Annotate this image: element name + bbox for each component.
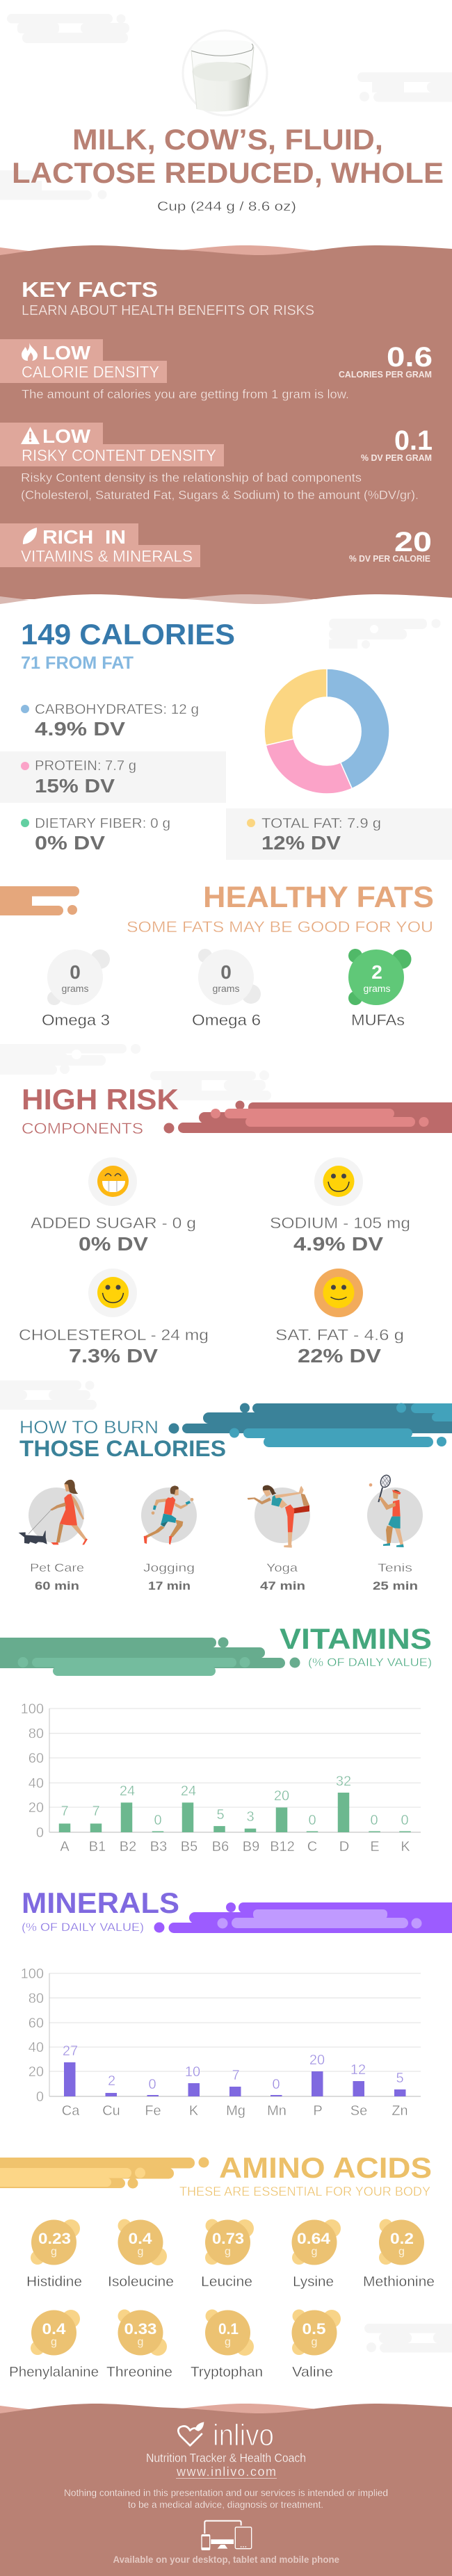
bar chart: vitamins: B2 (120, 1839, 136, 1854)
subheading: percent of daily value: (% OF DAILY VALUE) (22, 1921, 144, 1934)
subheading: percent of daily value: (% OF DAILY VALUE) (308, 1656, 432, 1669)
heading: those calories: THOSE CALORIES (19, 1436, 226, 1461)
metric: cholesterol: CHOLESTEROL - 24 mg (19, 1326, 209, 1344)
metric: mufas: MUFAs (351, 1011, 405, 1029)
metric: mufas: 2 (371, 961, 382, 983)
bar chart: vitamins: 40 (29, 1776, 44, 1791)
bar chart: vitamins: 20 (274, 1788, 289, 1804)
bar chart: minerals: Ca (62, 2103, 80, 2119)
amino values: first row: 0.73 (212, 2230, 244, 2247)
stat unit: dv per gram: % DV PER GRAM (361, 453, 432, 463)
bar chart: minerals: Mn (267, 2103, 286, 2119)
amino values: first row: g (312, 2246, 317, 2258)
label: rich in: RICH IN (42, 526, 126, 548)
amino values: second row: 0.1 (218, 2320, 239, 2338)
decorative clouds: header (0, 14, 452, 200)
panel: amino acids (0, 2151, 452, 2380)
bar chart: vitamins: 7 (92, 1804, 100, 1819)
bar chart: minerals: Cu (102, 2103, 120, 2119)
row: carbohydrates (21, 702, 199, 740)
activity: pet care (19, 1480, 88, 1592)
label boxes: low calorie density (0, 339, 167, 383)
icon: flame (22, 343, 38, 361)
bar chart: vitamins: 100 (21, 1702, 44, 1717)
metric: cholesterol (19, 1269, 209, 1367)
panel: minerals (21, 1886, 452, 2119)
icon: leaf (23, 528, 37, 544)
heading: amino acids: AMINO ACIDS (219, 2151, 432, 2184)
row: protein: 15% DV (35, 775, 115, 797)
metric: omega 3: 0 (70, 961, 81, 983)
bar chart: vitamins: B6 (212, 1839, 229, 1854)
band: protein (0, 751, 226, 803)
bar chart: vitamins: 24 (120, 1784, 135, 1799)
subheading: key facts: LEARN ABOUT HEALTH BENEFITS OR RISKS (22, 303, 314, 318)
amino values: second row: Valine (292, 2365, 333, 2380)
activity: yoga (248, 1485, 310, 1592)
bar chart: minerals: 5 (396, 2071, 404, 2086)
metric: mufas: grams (364, 983, 390, 994)
stat unit: dv per calorie: % DV PER CALORIE (349, 554, 430, 564)
decorative bars: vitamins (0, 1638, 300, 1676)
activity: jogging: Jogging (143, 1561, 195, 1574)
bar chart: minerals: P (313, 2103, 323, 2119)
metric: added sugar: ADDED SUGAR - 0 g (31, 1214, 196, 1232)
heading: vitamins: VITAMINS (280, 1622, 432, 1655)
row: dietary fiber (21, 816, 170, 854)
panel: healthy fats (0, 881, 434, 1029)
amino values: first row: Histidine (26, 2274, 82, 2290)
website link: www.inlivo.com (176, 2465, 276, 2479)
band: total fat (226, 808, 452, 860)
bar chart: vitamins: B5 (181, 1839, 197, 1854)
decorative bars: healthy fats (0, 886, 79, 915)
decorative bars: burn (168, 1403, 452, 1447)
metric: saturated fat: 22% DV (298, 1345, 381, 1367)
activity: jogging: 17 min (148, 1579, 191, 1592)
metric: omega 6: Omega 6 (192, 1011, 261, 1029)
amino values: second row: g (312, 2336, 317, 2348)
bar chart: vitamins: 0 (308, 1813, 316, 1828)
bar chart: minerals: 10 (185, 2064, 200, 2080)
bar chart: vitamins: B1 (89, 1839, 106, 1854)
description: risky content: (Cholesterol, Saturated Fat, Sugars & Sodium) to the amount (%DV/gr). (21, 488, 419, 502)
bar chart: vitamins: 0 (154, 1813, 162, 1828)
row: dietary fiber: DIETARY FIBER: 0 g (35, 816, 170, 831)
amino values: first row: g (138, 2246, 143, 2258)
amino values: first row: g (51, 2246, 57, 2258)
bar chart: minerals: 20 (309, 2053, 325, 2068)
heading: 149 calories: 149 CALORIES (21, 618, 235, 651)
serving size: Cup (244 g / 8.6 oz) (157, 199, 296, 213)
panel: calories (0, 618, 452, 860)
row: carbohydrates: 4.9% DV (35, 718, 125, 740)
bar chart: minerals: 0 (36, 2089, 44, 2105)
heading: healthy fats: HEALTHY FATS (203, 881, 434, 914)
metric: omega 3 (42, 949, 110, 1029)
bar chart: minerals: 0 (148, 2077, 156, 2092)
amino values: second row: Tryptophan (191, 2365, 263, 2380)
bar chart: minerals: Se (350, 2103, 367, 2119)
row: total fat (247, 816, 381, 854)
bar chart: vitamins: A (60, 1839, 70, 1854)
amino values: second row: 0.33 (124, 2320, 157, 2338)
bar chart: vitamins: 60 (29, 1751, 44, 1766)
metric: mufas (348, 949, 412, 1029)
bar chart: minerals: 27 (63, 2044, 78, 2059)
metric: omega 3: Omega 3 (42, 1011, 110, 1029)
icon: devices (202, 2521, 252, 2550)
icon: glass of milk (183, 31, 267, 115)
bar chart: minerals: Mg (226, 2103, 245, 2119)
bar chart: vitamins: 0 (370, 1813, 378, 1828)
bar chart: vitamins: C (307, 1839, 317, 1854)
amino values: first row: 0.64 (297, 2230, 331, 2247)
icon: woman walking dog (19, 1480, 88, 1544)
metric: added sugar: 0% DV (79, 1233, 148, 1255)
bar chart: vitamins: 20 (29, 1800, 44, 1816)
amino values: first row: g (225, 2246, 231, 2258)
amino values: first row: 0.4 (128, 2230, 152, 2247)
bar chart: vitamins: 80 (29, 1727, 44, 1742)
tagline: Nutrition Tracker & Health Coach (146, 2451, 306, 2465)
row: total fat: 12% DV (261, 832, 341, 854)
activity: yoga: Yoga (266, 1561, 298, 1574)
panel: vitamins (0, 1622, 432, 1854)
icon: runner (144, 1485, 193, 1544)
decorative bars: amino acids (0, 2158, 209, 2188)
label: risky content density: RISKY CONTENT DENSITY (22, 446, 216, 464)
stat unit: calories per gram: CALORIES PER GRAM (339, 370, 432, 380)
amino values: second row: g (51, 2336, 57, 2348)
metric: saturated fat: SAT. FAT - 4.6 g (275, 1326, 404, 1344)
metric: omega 6: grams (213, 983, 239, 994)
activity: tennis (367, 1474, 423, 1592)
metric: sodium (270, 1157, 410, 1255)
amino values: second row: Threonine (106, 2365, 172, 2380)
amino values: second row (9, 2320, 333, 2380)
row: total fat: TOTAL FAT: 7.9 g (261, 816, 381, 831)
label: low: LOW (42, 425, 91, 447)
panel: how to burn (0, 1380, 452, 1592)
metric: omega 3: grams (62, 983, 88, 994)
label: vitamins and minerals: VITAMINS & MINERALS (21, 547, 193, 565)
bar chart: vitamins: 5 (216, 1807, 225, 1823)
bar chart: vitamins: D (339, 1839, 349, 1854)
description: risky content (21, 471, 419, 502)
bar chart: minerals: 60 (29, 2016, 44, 2031)
activity: pet care: Pet Care (30, 1561, 84, 1574)
disclaimer: Nothing contained in this presentation and our services is intended or implied (64, 2487, 388, 2498)
bar chart: vitamins (21, 1702, 421, 1854)
disclaimer (64, 2487, 388, 2510)
bar chart: minerals: 80 (29, 1991, 44, 2006)
bar chart: vitamins: 7 (60, 1804, 69, 1819)
icon: tennis player (369, 1474, 404, 1547)
bar chart: minerals (21, 1966, 421, 2119)
metric: cholesterol: 7.3% DV (69, 1345, 158, 1367)
amino values: first row: 0.23 (38, 2230, 71, 2247)
bar chart: minerals: 100 (21, 1966, 44, 1982)
activity: tennis: 25 min (373, 1579, 418, 1592)
disclaimer: to be a medical advice, diagnosis or treatment. (128, 2499, 323, 2510)
amino values: second row: 0.4 (42, 2320, 66, 2338)
activity: tennis: Tenis (378, 1561, 412, 1574)
bar chart: minerals: 2 (108, 2073, 115, 2089)
subheading: from fat: 71 FROM FAT (21, 653, 134, 673)
metric: added sugar (31, 1157, 196, 1255)
metric: omega 6: 0 (220, 961, 232, 983)
panel: footer (0, 2404, 452, 2576)
bar chart: minerals: 12 (350, 2062, 366, 2078)
title: LACTOSE REDUCED, WHOLE (12, 156, 444, 189)
decorative bars: high risk (164, 1101, 452, 1133)
bar chart: vitamins: K (401, 1839, 410, 1854)
label boxes: low risky content (0, 423, 224, 466)
heading: how to burn: HOW TO BURN (19, 1417, 159, 1437)
heading: minerals: MINERALS (22, 1886, 179, 1919)
bar chart: vitamins: B12 (270, 1839, 295, 1854)
donut chart (264, 669, 389, 794)
availability note: Available on your desktop, tablet and mobile phone (113, 2554, 339, 2565)
bar chart: minerals: 0 (272, 2077, 280, 2092)
row: protein: PROTEIN: 7.7 g (35, 758, 136, 774)
amino values: first row (26, 2230, 435, 2290)
amino values: second row: g (138, 2336, 143, 2348)
amino values: first row: Lysine (293, 2274, 334, 2290)
bar chart: vitamins: 0 (401, 1813, 409, 1828)
logo wordmark: inlivo (213, 2418, 274, 2452)
icon: warning triangle (21, 427, 40, 444)
icon: yoga pose (248, 1485, 309, 1548)
title: MILK, COW’S, FLUID, (72, 123, 383, 156)
amino values: first row: g (398, 2246, 405, 2258)
bar chart: minerals: K (189, 2103, 199, 2119)
subheading: components: COMPONENTS (22, 1120, 143, 1137)
activity: pet care: 60 min (35, 1579, 79, 1592)
amino values: first row: Leucine (201, 2274, 252, 2290)
panel: high risk (0, 1044, 452, 1367)
metric: sodium: 4.9% DV (293, 1233, 383, 1255)
amino values: second row: g (225, 2336, 231, 2348)
bar chart: minerals: 20 (29, 2064, 44, 2080)
activity: jogging (141, 1485, 197, 1592)
stat: 0.6: 0.6 (387, 342, 433, 373)
bar chart: vitamins: B3 (150, 1839, 167, 1854)
bar chart: vitamins: 24 (181, 1784, 196, 1799)
amino values: first row: 0.2 (390, 2230, 414, 2247)
label: low: LOW (42, 342, 91, 364)
bar chart: vitamins: 32 (336, 1774, 351, 1789)
description: calorie density: The amount of calories you are getting from 1 gram is low. (22, 387, 349, 401)
label boxes: rich in (0, 523, 200, 567)
decorative bars: minerals (154, 1902, 452, 1933)
activity: yoga: 47 min (260, 1579, 305, 1592)
subheading: healthy fats: SOME FATS MAY BE GOOD FOR YOU (127, 918, 433, 936)
description: risky content: Risky Content density is the relationship of bad components (21, 471, 362, 484)
bar chart: minerals: Fe (145, 2103, 161, 2119)
row: dietary fiber: 0% DV (35, 832, 105, 854)
metric: sodium: SODIUM - 105 mg (270, 1214, 410, 1232)
row: protein (21, 758, 136, 797)
amino values: first row: Isoleucine (108, 2274, 174, 2290)
metric: saturated fat (275, 1269, 404, 1367)
amino values: second row: 0.5 (302, 2320, 325, 2338)
bar chart: vitamins: B9 (243, 1839, 259, 1854)
bar chart: vitamins: E (370, 1839, 380, 1854)
bar chart: vitamins: 3 (246, 1809, 255, 1825)
stat: 0.1: 0.1 (394, 425, 433, 456)
bar chart: minerals: 7 (232, 2068, 240, 2083)
title (12, 123, 444, 189)
bar chart: minerals: Zn (392, 2103, 408, 2119)
amino values: first row: Methionine (363, 2274, 435, 2290)
stat: 20: 20 (394, 527, 432, 557)
heading: key facts: KEY FACTS (22, 277, 158, 302)
label: calorie density: CALORIE DENSITY (22, 363, 159, 381)
metric: omega 6 (192, 949, 261, 1029)
bar chart: vitamins: 0 (36, 1825, 44, 1841)
icon: inlivo heart logo (178, 2422, 204, 2445)
subheading: amino acids: THESE ARE ESSENTIAL FOR YOUR BODY (179, 2184, 430, 2199)
panel: key facts (0, 245, 452, 612)
bar chart: minerals: 40 (29, 2040, 44, 2055)
row: carbohydrates: CARBOHYDRATES: 12 g (35, 702, 199, 717)
heading: high risk: HIGH RISK (22, 1083, 179, 1116)
amino values: second row: Phenylalanine (9, 2365, 99, 2380)
